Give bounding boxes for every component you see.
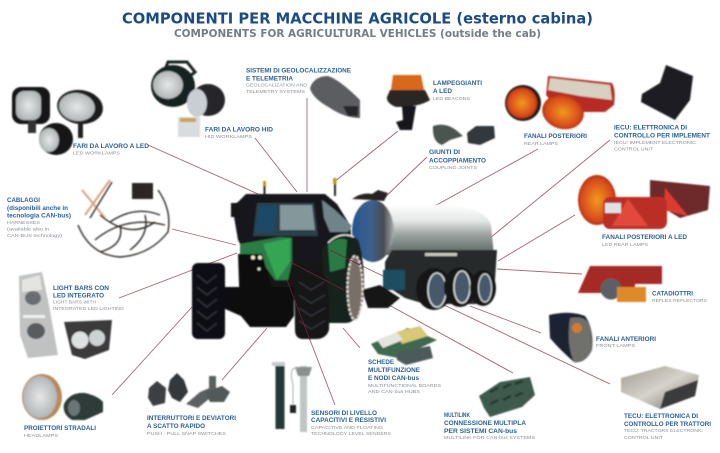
label: light bars: LIGHT BARS WITH [53,300,97,306]
label: TECU: CONTROLLO PER TRATTORI [624,421,711,428]
axle / underbody [223,287,294,327]
label: TECU: TECU: TRACTORS ELECTRONIC [624,428,704,434]
panel: headlamps [22,374,103,439]
label: multilink: MULTILINK FOR CAN-bus SYSTEMS [444,435,535,441]
label: multilink: CONNESSIONE MULTIPLA [444,420,526,427]
title [122,10,593,40]
label: LED rear lamps [602,234,687,248]
panel: reflex reflectors [578,266,707,304]
label: level senders [311,410,391,437]
icon: beacon [387,75,430,130]
panel: LED worklamps [12,87,149,156]
panel: light bars [19,272,124,359]
label: rear lamps [524,133,587,147]
label: harnesses: CABLAGGI [7,197,40,204]
label: LED worklamps: FARI DA LAVORO A LED [73,143,149,150]
dark body block [240,228,332,300]
panel: geolocation and telemetry [246,68,360,118]
label: light bars: INTEGRATED LED LIGHTING [53,306,124,312]
panel: harnesses [7,180,169,257]
label: geolocation and telemetry: SISTEMI DI GEOLOCALIZZAZIONE [246,68,352,74]
label: LED beacons [433,80,482,102]
panel: multifunction boards [368,326,441,395]
title: English: COMPONENTS FOR AGRICULTURAL VEHICLES (outside the cab) [174,28,541,40]
panel: coupling joints [429,125,495,171]
icon: TECU unit [621,366,699,409]
label: harnesses: HARNESSES [7,220,40,226]
panel: front lamps [549,313,656,362]
cab [232,194,354,262]
label: snap switches: INTERRUTTORI E DEVIATORI [147,415,236,422]
label: front lamps: FRONT LAMPS [596,343,635,349]
label: HID worklamps: FARI DA LAVORO HID [205,126,273,134]
engine hood [240,237,292,280]
panel: TECU [621,366,711,441]
tractor [192,178,364,339]
label: IECU: CONTROL UNIT [614,146,653,152]
label: reflex reflectors [652,290,707,304]
label: harnesses: (disponibili anche in [7,205,68,212]
icon: level senders [272,362,312,432]
icon: boards [371,326,437,365]
label: multifunction boards: MULTIFUNZIONE [368,367,421,374]
label: multifunction boards: E NODI CAN-bus [368,375,419,382]
label: snap switches: PUSH - PULL SNAP SWITCHES [147,431,226,437]
tanker trailer [352,190,497,310]
label: level senders: CAPACITIVE AND FLOATING [311,425,383,431]
label: headlamps [24,425,96,439]
label: IECU: IECU: IMPLEMENT ELECTRONIC [614,140,697,146]
icon: coupling joints [433,125,495,145]
label: IECU: CONTROLLO PER IMPLEMENT [614,132,710,140]
label: IECU [614,124,710,152]
label: LED rear lamps: LED REAR LAMPS [602,242,648,248]
label: harnesses: CAN-BUS technology) [7,233,62,239]
label: snap switches [147,415,236,437]
label: HID worklamps: HID WORKLAMPS [205,134,252,140]
label: coupling joints [429,149,486,171]
label: harnesses: (available also in [7,226,49,232]
tank front dome [352,200,394,262]
beacons [263,181,266,187]
icon: headlamps [22,374,103,420]
panel: rear lamps [505,76,615,147]
icon: reflectors [578,266,662,302]
icon: HID worklamps [151,62,225,137]
front right wheel [294,266,329,339]
label: coupling joints: ACCOPPIAMENTO [429,158,486,164]
icon: LED worklamps [12,87,105,155]
label: TECU [624,413,711,441]
panel: LED rear lamps [578,175,710,248]
label: geolocation and telemetry: TELEMETRY SYSTEMS [246,89,305,95]
label: headlamps: PROIETTORI STRADALI [24,425,96,432]
icon: multilink connectors [479,377,535,417]
label: geolocation and telemetry [246,68,352,95]
panel: snap switches [147,373,236,437]
label: reflex reflectors: CATADIOTTRI [652,290,693,298]
trailer chassis [385,250,497,304]
label: harnesses [7,197,71,239]
label: LED beacons: A LED [433,88,452,95]
label: geolocation and telemetry: E TELEMETRIA [246,76,293,82]
rear wheel with chain [322,234,364,323]
label: LED worklamps: LED WORKLAMPS [73,150,120,156]
label: multifunction boards: MULTIFUNCTIONAL BOARDS [368,383,441,389]
label: light bars: LIGHT BARS CON [53,285,109,292]
mirror [231,203,240,217]
label: multifunction boards: AND CAN-bus HUBS [368,389,420,395]
label: LED beacons: LED BEACONS [433,96,470,102]
label: LED rear lamps: FANALI POSTERIORI A LED [602,234,687,241]
label: TECU: CONTROL UNIT [624,435,663,441]
label: coupling joints: GIUNTI DI [429,149,460,156]
icon: rear lamps [505,76,615,134]
icon: wiring harness [78,180,169,257]
icon: telemetry device [310,76,360,118]
label: geolocation and telemetry: GEOLOCALIZATION AND [246,82,308,88]
front left wheel [192,263,225,339]
label: level senders: TECHNOLOGY LEVEL SENDERS [311,431,391,437]
icon: light bars [19,272,112,359]
label: LED beacons: LAMPEGGIANTI [433,80,482,87]
panel: level senders [272,362,391,437]
label: multilink: PER SISTEMI CAN-bus [444,428,517,435]
label: IECU: IECU: ELETTRONICA DI [614,124,687,132]
label: headlamps: HEADLAMPS [24,433,58,439]
panel: multilink [444,377,535,441]
label: HID worklamps [205,126,273,140]
icon: front lamp [549,313,592,362]
red leader lines over tractor [287,250,360,340]
title: Italian: COMPONENTI PER MACCHINE AGRICOLE (esterno cabina) [122,10,593,28]
label: multilink [444,412,535,441]
icon: LED rear lamps [578,175,710,229]
label: front lamps: FANALI ANTERIORI [596,336,656,343]
trailer wheels [416,267,496,310]
tank body [375,204,494,255]
icon: IECU unit [641,65,693,120]
panel: LED beacons [387,75,482,130]
panel: HID worklamps [151,62,273,140]
label: rear lamps: FANALI POSTERIORI [524,133,587,140]
panel: IECU [614,65,710,152]
label: snap switches: A SCATTO RAPIDO [147,423,205,430]
label: multilink: MULTILINK [444,412,470,419]
label: TECU: TECU: ELETTRONICA DI [624,413,698,420]
icon: switches [148,373,230,408]
leader lines [112,98,610,405]
label: level senders: CAPACITIVI E RESISTIVI [311,417,386,424]
label: coupling joints: COUPLING JOINTS [429,165,477,171]
label: light bars [53,285,124,312]
label: front lamps [596,336,656,349]
label: light bars: LED INTEGRATO [53,292,104,300]
label: multifunction boards [368,359,441,395]
label: reflex reflectors: REFLEX REFLECTORS [652,298,707,304]
label: harnesses: tecnologia CAN-bus) [7,212,71,220]
label: LED worklamps [73,143,149,156]
label: rear lamps: REAR LAMPS [524,141,558,147]
label: multifunction boards: SCHEDE [368,359,395,366]
label: level senders: SENSORI DI LIVELLO [311,410,377,417]
